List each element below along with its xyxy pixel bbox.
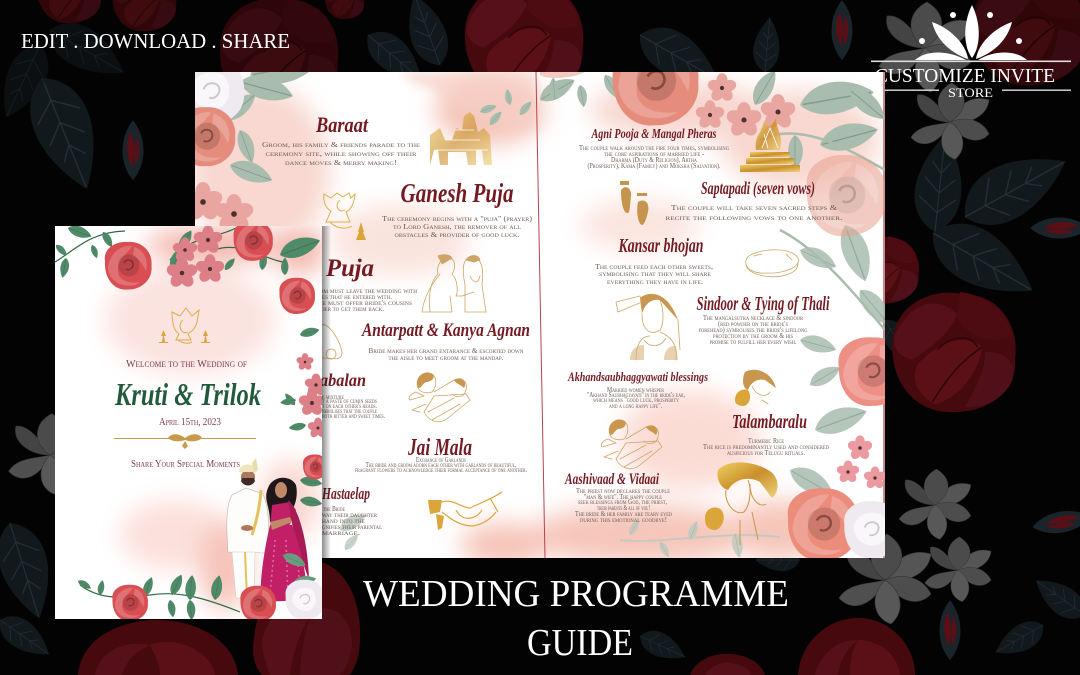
section: Puja: Groom must leave the wedding with bbox=[307, 287, 417, 295]
section: Hastaelap: the Bride bbox=[323, 505, 345, 513]
section: Agni Pooja and Mangal Pheras: (Prosperity), Kama (Family) and Moksha (Salvation). bbox=[588, 162, 721, 170]
section: Sindoor and Tying of Thali bbox=[696, 293, 830, 346]
section: Talambaralu bbox=[703, 414, 829, 455]
text: couple names: Kruti & Trilok bbox=[114, 376, 261, 412]
icon: plate of sweets bbox=[746, 250, 798, 277]
section: Sindoor and Tying of Thali: forehead) symbolises the bride's lifelong bbox=[698, 326, 808, 334]
logo: customize invite store: CUSTOMIZE INVITE bbox=[875, 65, 1055, 87]
icon: couple under cloth bbox=[409, 373, 470, 422]
section: Jai Mala: Jai Mala bbox=[407, 435, 472, 461]
section: Puja: shoes that he entered with. bbox=[312, 293, 392, 301]
icon: women whispering bbox=[735, 370, 776, 406]
flowers: card bottom right bbox=[240, 580, 325, 622]
flowers: card bottom bbox=[77, 572, 240, 621]
panel: programme spread bbox=[195, 72, 885, 558]
section: Kansar bhojan bbox=[595, 238, 712, 284]
section: Talambaralu: The rice is predominantly used and considered bbox=[703, 443, 829, 451]
flowers: bottom garland bbox=[340, 514, 780, 558]
icon: gold footprints bbox=[620, 181, 648, 225]
title: wedding programme guide: WEDDING PROGRAMME bbox=[363, 573, 789, 615]
section: Jai Mala bbox=[355, 438, 527, 472]
section: Baraat: Baraat bbox=[315, 112, 369, 137]
icon: couple exchanging garlands bbox=[422, 255, 486, 312]
section: Ganesh Puja bbox=[382, 183, 532, 237]
section: Jeerakam bellam: t on each other's heads. bbox=[322, 402, 377, 410]
section: Saptapadi: Saptapadi (seven vows) bbox=[701, 178, 815, 199]
section: Aashivaad and Vidaai bbox=[564, 471, 672, 524]
section: Baraat: ceremony site, while showing off their bbox=[266, 150, 417, 158]
section: Kansar bhojan: The couple feed each other sweets, bbox=[595, 263, 713, 271]
icon: gold fire altar bbox=[740, 118, 800, 172]
icon: gold elephant procession bbox=[430, 112, 492, 165]
section: Baraat bbox=[262, 118, 420, 165]
section: Aashivaad and Vidaai: their parents & all of you! bbox=[597, 504, 650, 512]
section: Hastaelap: Hastaelap bbox=[321, 484, 370, 503]
title: wedding programme guide bbox=[363, 573, 789, 664]
section: Agni Pooja and Mangal Pheras: Agni Pooja & Mangal Pheras bbox=[591, 127, 717, 142]
bottom-edge dark roses bbox=[78, 560, 915, 675]
section: Jai Mala: The bride and groom adorn each other with garlands of beautiful, bbox=[366, 461, 517, 469]
section: Hastaelap: hand into the bbox=[322, 517, 365, 525]
shadow cast by invitation card bbox=[322, 226, 331, 559]
section: Ganesh Puja: Ganesh Puja bbox=[400, 178, 514, 208]
text: welcome line: Welcome to the Wedding of bbox=[126, 358, 247, 370]
section: Puja: Puja bbox=[325, 255, 374, 282]
flowers: right side bbox=[760, 132, 885, 558]
flowers: card right edge bbox=[280, 325, 329, 508]
section: Hastaelap: way their daughter bbox=[322, 511, 378, 519]
section: Jeerakam bellam: t a paste of cumin seeds bbox=[322, 397, 377, 405]
section: Saptapadi: The couple will take seven sacred steps & bbox=[671, 204, 838, 212]
section: Talambaralu: Turmeric Rice bbox=[748, 437, 784, 445]
section: Aashivaad and Vidaai: The bride & her family are teary eyed bbox=[575, 510, 672, 518]
section: Baraat: dance moves & merry making! bbox=[285, 159, 397, 167]
section: Sindoor and Tying of Thali: Sindoor & Tying of Thali bbox=[696, 293, 830, 315]
section: Saptapadi: recite the following vows to one another. bbox=[666, 214, 843, 222]
logo: customize invite store: STORE bbox=[948, 85, 993, 100]
section: Aashivaad and Vidaai: "man & wife". The happy couple bbox=[584, 493, 662, 501]
illustration: groom and bride bbox=[227, 458, 317, 602]
icon: gold couple with pot bbox=[705, 462, 778, 545]
text: edit download share: EDIT . DOWNLOAD . SHARE bbox=[21, 29, 290, 53]
section: Agni Pooja and Mangal Pheras: The couple walk around the fire four times, symbolising bbox=[579, 144, 729, 152]
section: Akhandsaubhaggyawati blessings: "Akhand Saubhagyavati" in the bride's ear, bbox=[587, 391, 685, 399]
section: Puja: order to get them back. bbox=[314, 305, 384, 313]
section: Antarpatt and Kanya Agnan bbox=[361, 324, 530, 360]
watercolour washes bbox=[190, 75, 880, 567]
section: Aashivaad and Vidaai: The priest now declares the couple bbox=[576, 487, 670, 495]
section: Akhandsaubhaggyawati blessings: Married women whisper bbox=[607, 386, 665, 394]
section: Talambaralu: Talambaralu bbox=[732, 411, 807, 433]
icon: bride receiving sindoor bbox=[616, 294, 680, 360]
section: Talambaralu: auspicious for Telugu rituals. bbox=[727, 449, 805, 457]
logo: customize invite store bbox=[871, 5, 1071, 100]
section: Ganesh Puja: to Lord Ganesh, the remover of all bbox=[393, 223, 521, 231]
section: Sindoor and Tying of Thali: protection by the groom & his bbox=[713, 332, 793, 340]
section: Agni Pooja and Mangal Pheras bbox=[579, 127, 729, 170]
section: Hastaelap: marriage. bbox=[322, 529, 360, 537]
section: Kansar bhojan: Kansar bhojan bbox=[618, 235, 704, 257]
section: Jeerakam bellam: e mixture bbox=[322, 393, 344, 401]
section: Akhandsaubhaggyawati blessings: which means "good luck, prosperity bbox=[593, 396, 679, 404]
icon: gold lamp right of ganesha bbox=[356, 222, 366, 240]
title: wedding programme guide: GUIDE bbox=[527, 622, 633, 664]
section: Hastaelap bbox=[322, 487, 382, 535]
section: Saptapadi bbox=[666, 182, 842, 220]
section: Aashivaad and Vidaai: during this emotional goodbye! bbox=[580, 516, 667, 524]
section: Jeerakam bellam: both bitter and sweet times. bbox=[322, 412, 385, 420]
spine bbox=[536, 72, 545, 558]
section: Agni Pooja and Mangal Pheras: Dharma (Duty & Religion), Artha bbox=[611, 156, 697, 164]
section: Jai Mala: Exchange of Garlands bbox=[416, 456, 466, 464]
icon: gold ganesha on back panel bbox=[324, 193, 355, 228]
section: Ganesh Puja: The ceremony begins with a "puja" (prayer) bbox=[382, 215, 533, 223]
watercolour washes bbox=[105, 225, 325, 610]
section: Kansar bhojan: everything they have in life. bbox=[607, 278, 703, 286]
icon: gold coconut bbox=[322, 325, 342, 359]
section: Jeerakam bellam: nbrolises that the couple bbox=[322, 407, 377, 415]
section: Sindoor and Tying of Thali: (red powder on the bride's bbox=[718, 320, 788, 328]
section: Kansar bhojan: symbolising that they will share bbox=[599, 270, 711, 278]
section: Jai Mala: fragrant flowers to acknowledge their formal acceptance of one another. bbox=[355, 466, 527, 474]
section: Sindoor and Tying of Thali: promise to fulfill her every wish. bbox=[710, 338, 797, 346]
section: Puja bbox=[322, 258, 417, 311]
flowers: top centre of right page bbox=[540, 72, 884, 165]
section: Jeerakam bellam bbox=[322, 374, 385, 418]
text: share line: Share Your Special Moments bbox=[131, 459, 240, 470]
flowers: card top bbox=[54, 221, 323, 314]
icon: couple under cloth, right page bbox=[601, 420, 662, 469]
section: Antarpatt and Kanya Agnan: Antarpatt & Kanya Agnan bbox=[361, 320, 530, 341]
section: Hastaelap: gnifies their parental bbox=[322, 523, 382, 531]
flowers: left page corner bbox=[195, 72, 532, 226]
section: Akhandsaubhaggyawati blessings: and a long happy life". bbox=[609, 402, 662, 410]
section: Agni Pooja and Mangal Pheras: the core aspirations of married life - bbox=[604, 150, 705, 158]
divider: gold ornament bbox=[114, 434, 256, 449]
icon: gold ganesha on card bbox=[172, 308, 199, 343]
section: Jeerakam bellam: abalan bbox=[320, 370, 366, 390]
panel: invitation card bbox=[54, 221, 329, 622]
icon: gold handshake bbox=[428, 492, 502, 530]
section: Aashivaad and Vidaai: seek blessings from God, the priest, bbox=[578, 498, 667, 506]
section: Antarpatt and Kanya Agnan: Bride makes her grand entarance & escorted down bbox=[368, 347, 524, 355]
icon: gold lamps on card bbox=[159, 330, 210, 343]
section: Sindoor and Tying of Thali: The mangalsutra necklace & sindoor bbox=[703, 314, 804, 322]
section: Puja: He must offer bride's cousins bbox=[317, 299, 412, 307]
text: date: April 15th, 2023 bbox=[159, 417, 221, 428]
section: Aashivaad and Vidaai: Aashivaad & Vidaai bbox=[564, 471, 659, 488]
section: Antarpatt and Kanya Agnan: the aisle to meet groom at the mandap. bbox=[388, 354, 504, 362]
section: Akhandsaubhaggyawati blessings: Akhandsaubhaggyawati blessings bbox=[567, 369, 708, 384]
section: Ganesh Puja: obstacles & provider of good luck. bbox=[394, 231, 520, 239]
section: Baraat: Groom, his family & friends parade to the bbox=[262, 141, 420, 149]
section: Akhandsaubhaggyawati blessings bbox=[568, 372, 708, 408]
